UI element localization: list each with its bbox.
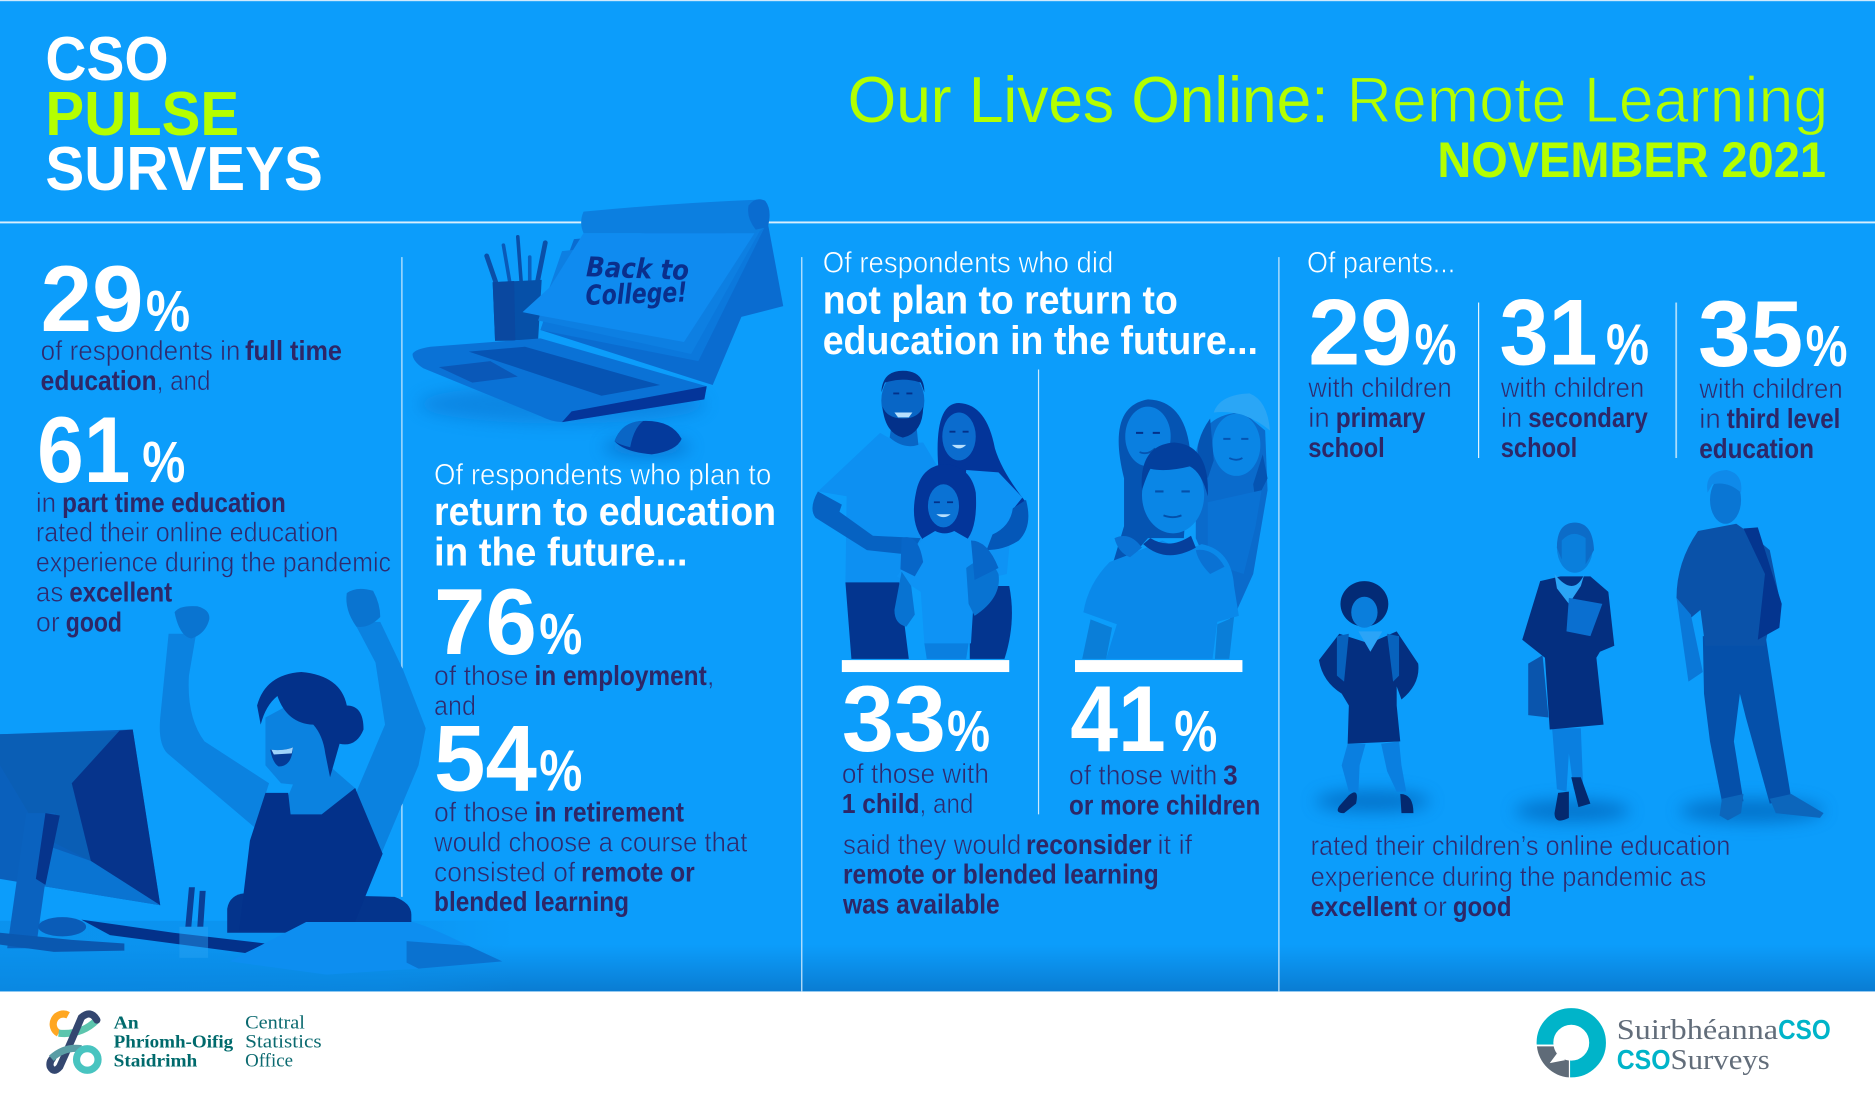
- chair: [227, 893, 411, 933]
- text block: return to education in the future: in retirement: [535, 797, 685, 828]
- text block: 29% and 61% rated online education: , and: [157, 365, 210, 396]
- text block: 33% and 41%: %: [947, 699, 990, 764]
- stat bars under photos: [842, 660, 1242, 672]
- text block: return to education in the future: remote or: [581, 856, 695, 887]
- text block: return to education in the future: and: [434, 690, 476, 721]
- image: third level student: [1676, 470, 1824, 823]
- text block: return to education in the future: %: [539, 602, 582, 667]
- text block: 33% and 41%: reconsider: [1026, 829, 1152, 860]
- text block: 33% and 41%: , and: [920, 788, 973, 819]
- text block: return to education in the future: consisted of: [434, 856, 575, 887]
- woman: [938, 403, 1028, 659]
- title: CSO Pulse Surveys: SURVEYS: [45, 135, 323, 204]
- text block: of parents 29% 31% 35%: with children: [1307, 372, 1452, 403]
- fists: [175, 606, 209, 639]
- text block: 29% and 61% rated online education: of respondents in: [41, 335, 240, 366]
- heading: did not plan to return to education: [823, 247, 1258, 363]
- text block: 29% and 61% rated online education: %: [146, 279, 190, 344]
- boy: [1082, 442, 1239, 659]
- text block: 33% and 41%: or more children: [1069, 789, 1260, 820]
- keyboard and mouse: [81, 920, 265, 953]
- text block: return to education in the future: would choose a course that: [433, 826, 748, 857]
- image: family of three: [812, 371, 1028, 659]
- text block: of parents 29% 31% 35%: school: [1501, 432, 1577, 463]
- text block: of parents 29% 31% 35%: 31: [1500, 281, 1598, 385]
- logo: CSO Surveys: [1535, 1014, 1831, 1080]
- text block: of parents 29% 31% 35%: %: [1606, 313, 1649, 378]
- icon: speech ring: [1535, 1016, 1598, 1080]
- text block: of parents 29% 31% 35%: primary: [1336, 402, 1426, 433]
- text block: 33% and 41%: said they would: [843, 829, 1021, 860]
- text block: 33% and 41%: remote or blended learning: [843, 859, 1159, 890]
- text block: of parents 29% 31% 35%: [1307, 247, 1847, 464]
- man: [812, 371, 938, 659]
- logo: CSO Surveys: CSO: [1778, 1014, 1831, 1045]
- logo: Central Statistics Office: Office: [245, 1051, 293, 1072]
- text block: 29% and 61% rated online education: full time: [245, 335, 342, 366]
- text block: 33% and 41%: %: [1174, 699, 1217, 764]
- text block: return to education in the future: in employment: [535, 660, 707, 691]
- text block: 29% and 61% rated online education: 29: [41, 247, 143, 351]
- text block: 29% and 61% rated online education: rated their online education: [36, 517, 338, 548]
- heading: did not plan to return to education: not plan to return to: [823, 278, 1178, 322]
- logo: Central Statistics Office: [50, 1012, 322, 1072]
- image: celebrating woman at desk with computer: [0, 589, 514, 991]
- image: primary school girl: [1315, 581, 1430, 813]
- logo: Central Statistics Office: An: [114, 1012, 139, 1032]
- text block: of parents 29% 31% 35%: %: [1806, 314, 1847, 379]
- text block: 29% and 61% rated online education: excellent: [69, 576, 173, 607]
- text block: of parents 29% 31% 35%: 35: [1698, 282, 1803, 386]
- text block: 33% and 41%: was available: [842, 889, 1000, 920]
- heading: did not plan to return to education: education in the future...: [823, 319, 1258, 363]
- text block: return to education in the future: ,: [707, 660, 715, 691]
- logo: CSO Surveys: CSO: [1617, 1044, 1671, 1075]
- girl: [894, 464, 999, 659]
- logo: Central Statistics Office: Statistics: [245, 1032, 322, 1053]
- monitor: [0, 729, 160, 905]
- text block: 33% and 41%: 33: [842, 667, 946, 771]
- mouse: [615, 421, 682, 454]
- text block: return to education in the future: return to education: [434, 490, 776, 534]
- logo: CSO Surveys: Surveys: [1671, 1045, 1770, 1076]
- text block: 29% and 61% rated online education: experience during the pandemic: [36, 547, 391, 578]
- image: secondary school girl: [1515, 523, 1630, 822]
- image: laptop and notebook, Back to College: College!: [585, 276, 688, 312]
- text block: of parents 29% 31% 35%: in: [1699, 403, 1721, 434]
- text block: rated their children's online education: rated their children’s online education: [1311, 830, 1730, 861]
- notebook page: [523, 233, 755, 342]
- text block: of parents 29% 31% 35%: 29: [1308, 281, 1412, 385]
- text block: return to education in the future: 76: [434, 570, 537, 674]
- text block: of parents 29% 31% 35%: school: [1308, 432, 1385, 463]
- laptop base: [413, 338, 707, 422]
- heading: Our Lives Online: Remote Learning, November 2021: Remote Learning: [1346, 64, 1828, 136]
- text block: of parents 29% 31% 35%: in: [1501, 402, 1522, 433]
- text block: rated their children's online education: experience during the pandemic as: [1311, 861, 1706, 892]
- text block: rated their children's online education: good: [1453, 891, 1511, 922]
- text block: rated their children's online education: [1311, 830, 1730, 922]
- title: CSO Pulse Surveys: [45, 25, 323, 204]
- heading: Our Lives Online: Remote Learning, November 2021: [848, 64, 1828, 188]
- neck and face: [257, 700, 356, 827]
- logo: Central Statistics Office: Central: [245, 1012, 305, 1033]
- text block: 33% and 41%: it if: [1158, 829, 1192, 860]
- text block: return to education in the future: [433, 458, 776, 917]
- text block: 29% and 61% rated online education: in: [36, 487, 56, 518]
- text block: of parents 29% 31% 35%: in: [1308, 402, 1330, 433]
- heading: Our Lives Online: Remote Learning, November 2021: NOVEMBER 2021: [1437, 132, 1826, 188]
- text block: rated their children's online education: or: [1423, 891, 1447, 922]
- text block: of parents 29% 31% 35%: %: [1415, 313, 1456, 378]
- text block: of parents 29% 31% 35%: third level: [1727, 403, 1840, 434]
- text block: return to education in the future: of those: [434, 660, 529, 691]
- right girl with cap: [1196, 393, 1270, 622]
- text block: 29% and 61% rated online education: %: [142, 430, 185, 495]
- notebook handwriting: Back to: [586, 251, 690, 287]
- text block: return to education in the future: Of respondents who plan to: [434, 458, 771, 491]
- left girl: [1106, 399, 1190, 586]
- raised arms: [160, 634, 269, 827]
- logo: Central Statistics Office: Staidrimh: [114, 1051, 197, 1071]
- text block: 33% and 41%: 1 child: [842, 788, 920, 819]
- text block: of parents 29% 31% 35%: Of parents...: [1307, 247, 1455, 280]
- title: CSO Pulse Surveys: CSO: [45, 25, 169, 94]
- text block: of parents 29% 31% 35%: with children: [1698, 373, 1843, 404]
- text block: return to education in the future: 54: [434, 706, 537, 810]
- text block: return to education in the future: blended learning: [434, 886, 629, 917]
- text block: 33% and 41%: of those with: [842, 758, 989, 789]
- text block: return to education in the future: in the future...: [434, 531, 688, 575]
- pencil pot: [185, 887, 206, 927]
- text block: 33% and 41%: 3: [1223, 759, 1238, 790]
- open book: [230, 922, 502, 975]
- text block: 29% and 61% rated online education: or: [36, 606, 60, 637]
- text block: of parents 29% 31% 35%: with children: [1500, 372, 1644, 403]
- text block: of parents 29% 31% 35%: education: [1699, 433, 1814, 464]
- text block: of parents 29% 31% 35%: secondary: [1528, 402, 1648, 433]
- logo: CSO Surveys: Suirbhéanna: [1617, 1015, 1779, 1046]
- text block: 29% and 61% rated online education: good: [66, 606, 122, 637]
- pens and cup: [487, 237, 545, 341]
- icon: CSO knot: [50, 1014, 98, 1070]
- text block: 29% and 61% rated online education: 61: [37, 398, 130, 502]
- dress: [239, 788, 383, 930]
- text block: rated their children's online education: excellent: [1311, 891, 1418, 922]
- title: CSO Pulse Surveys: PULSE: [45, 80, 239, 149]
- laptop screen and hanging pages: [540, 222, 783, 385]
- text block: 33% and 41%: [842, 667, 1260, 920]
- text block: 29% and 61% rated online education: as: [36, 576, 63, 607]
- heading: did not plan to return to education: Of respondents who did: [823, 247, 1113, 280]
- hair: [257, 672, 364, 777]
- logo: Central Statistics Office: Phríomh-Oifig: [114, 1032, 233, 1052]
- text block: 33% and 41%: 41: [1070, 667, 1166, 771]
- image: three children: [1082, 393, 1270, 659]
- heading: Our Lives Online: Remote Learning, November 2021: Our Lives Online:: [848, 64, 1329, 136]
- text block: 33% and 41%: of those with: [1069, 759, 1217, 790]
- mouth: [270, 747, 293, 767]
- text block: 29% and 61% rated online education: education: [41, 365, 157, 396]
- text block: 29% and 61% rated online education: part time education: [62, 487, 286, 518]
- text block: 29% and 61% rated online education: [36, 247, 391, 637]
- text block: return to education in the future: %: [539, 738, 582, 803]
- image: laptop and notebook, Back to College: [413, 199, 783, 456]
- text block: return to education in the future: of those: [434, 797, 529, 828]
